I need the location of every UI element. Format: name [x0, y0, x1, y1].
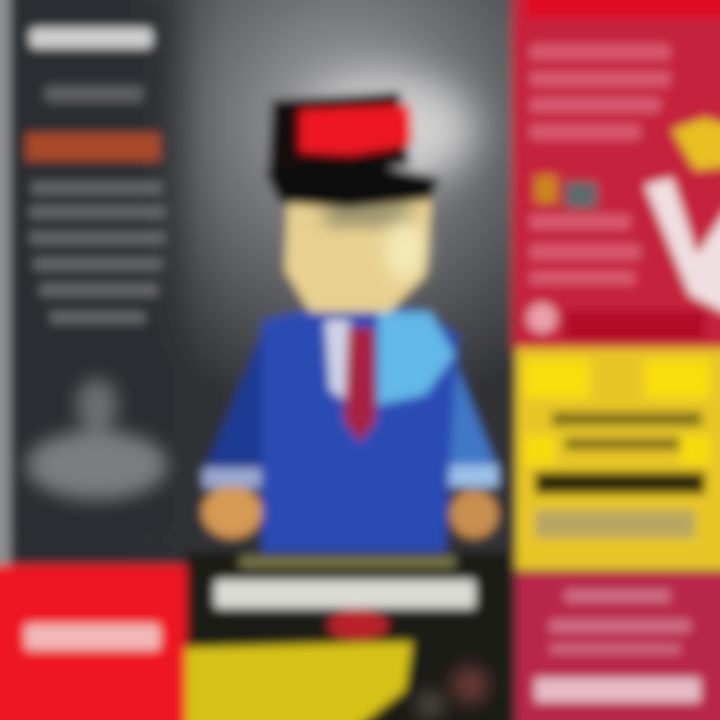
yellow banner [186, 642, 412, 720]
glow behind hat [305, 75, 475, 185]
heading [30, 28, 152, 48]
panel: bottom centre [186, 552, 511, 720]
orange label [26, 133, 160, 161]
tie [344, 328, 376, 442]
hands [202, 486, 498, 538]
white caption [535, 678, 700, 702]
torso [262, 305, 458, 552]
panel: left column text [26, 28, 167, 499]
olive text rows [552, 412, 702, 450]
black dots row [535, 472, 705, 494]
text block [30, 182, 165, 323]
icon: yellow mark [672, 118, 720, 170]
shirt collar left [325, 320, 350, 400]
hat red band [300, 105, 412, 155]
white dot [527, 303, 557, 333]
character figure [202, 75, 498, 552]
hat crown [268, 92, 410, 180]
subheading [45, 86, 143, 102]
shirt collar right [378, 312, 455, 405]
icon: small multicolour badge [535, 175, 597, 208]
white label [25, 624, 160, 650]
panel: yellow right [516, 348, 720, 570]
red badge [328, 609, 388, 641]
panel: dark red bottom right [516, 572, 720, 720]
panel: red top right [512, 0, 720, 350]
face [285, 195, 432, 312]
dark red band [565, 310, 705, 340]
bottom right debris [418, 667, 488, 717]
face highlight [385, 220, 425, 280]
top yellow labels [525, 360, 710, 398]
text block [530, 45, 670, 284]
beige text [535, 510, 695, 538]
face shadow band [325, 205, 410, 225]
hat brim [265, 158, 440, 208]
olive strip [240, 556, 455, 568]
arms [203, 325, 498, 490]
white title [215, 580, 475, 608]
icon: white check [645, 178, 720, 315]
panel: red bottom left [0, 565, 186, 720]
text rows [550, 590, 690, 653]
bright highlights [525, 435, 710, 465]
icon: pyramid graphic [27, 379, 167, 499]
